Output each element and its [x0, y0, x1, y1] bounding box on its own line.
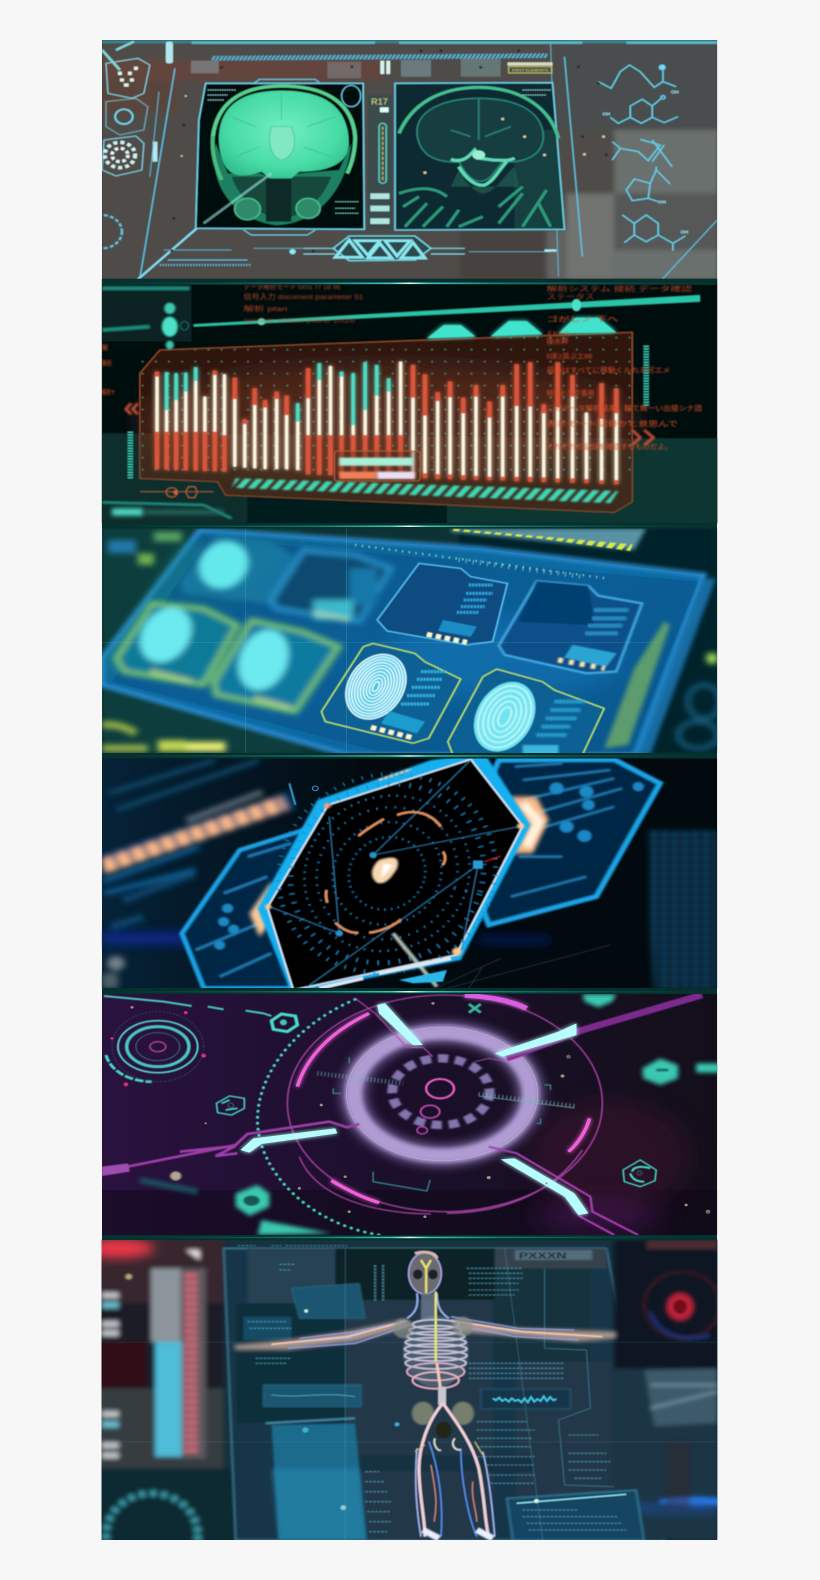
left icon column	[102, 40, 152, 250]
outer thin magenta rings	[287, 995, 602, 1214]
pink center circles	[417, 1079, 454, 1134]
red Japanese data text: ゴがしノ 下へ	[547, 315, 618, 323]
red Japanese data text: 解析ヤ	[102, 388, 115, 396]
teal trapezoids	[427, 318, 616, 338]
image backing	[102, 40, 717, 1540]
red Japanese data text: ステータス	[547, 293, 594, 301]
status bars left	[102, 1292, 119, 1458]
teal bar caps	[167, 362, 389, 425]
sharp fingerprint card	[321, 643, 461, 743]
red Japanese data text: 特マヒラク事用	[547, 389, 594, 397]
right background hexagon	[459, 759, 660, 925]
red Japanese data text: 解析 plan	[244, 305, 287, 313]
blurred top-left cards	[116, 535, 391, 712]
red Japanese data text: 5床2具ぶエ96	[547, 352, 592, 360]
spine and pelvis	[437, 1363, 443, 1403]
HUD frame lines	[138, 43, 717, 279]
left dim column	[82, 1235, 238, 1577]
dotted ruler	[355, 545, 606, 578]
red Japanese data text: このデータ解析結果、観て無一い出接シナ語	[547, 404, 703, 412]
teal dotted arc	[257, 999, 379, 1235]
left brain scan	[196, 79, 364, 235]
left background hexagon	[182, 830, 303, 988]
blue tile bottom-left	[271, 1423, 366, 1540]
dotted arc bottom-left	[106, 1493, 198, 1577]
red Japanese data text: 解析システム 接続 データ確認	[547, 285, 693, 293]
cyan bright blades	[240, 1003, 588, 1215]
labels: OH groups: OH	[681, 230, 689, 235]
chart background panel	[140, 332, 632, 512]
data blocks	[244, 1283, 644, 1540]
skeleton arms	[234, 1317, 616, 1350]
legs	[415, 1403, 495, 1538]
red Japanese data text: 解	[102, 344, 109, 352]
slanted teal stripes	[232, 478, 618, 503]
rulers	[317, 1057, 574, 1191]
center slider box	[334, 451, 420, 481]
blurred side ornaments	[102, 532, 720, 752]
red Japanese data text: それぞれの記録を確認するものだよ。	[547, 443, 672, 451]
triangle control row	[303, 236, 465, 261]
blurred background stripes	[102, 760, 551, 988]
waveform	[493, 1396, 557, 1402]
text lines blocks	[238, 1246, 626, 1532]
red Japanese data text: データ解析モード 0x51 77 1B 9E	[244, 283, 341, 291]
labels: OH groups	[602, 90, 689, 235]
panel: hexagon radar HUD	[102, 753, 717, 993]
yellow hatched strip	[451, 528, 646, 550]
dot grid	[170, 49, 608, 252]
orange arc segments	[326, 812, 445, 933]
panel: human skeleton hologram HUD	[82, 1235, 730, 1577]
chevrons	[126, 403, 653, 445]
side teal tick strips	[130, 346, 646, 479]
lower right fingerprint card	[448, 669, 604, 759]
red Japanese data text: 操水粹	[547, 337, 569, 345]
hex icons	[216, 1014, 656, 1187]
red Japanese data text: それから	[547, 330, 570, 338]
right brain scan	[395, 83, 564, 230]
red Japanese data text: 信号入力 document parameter 51	[244, 293, 363, 301]
panel: fingerprint scanner HUD	[102, 528, 720, 759]
skeleton hologram	[234, 1252, 616, 1538]
small data text top	[191, 58, 553, 78]
skull	[409, 1253, 441, 1294]
labels: OH groups: OH	[658, 200, 667, 205]
tinted tiles	[236, 1248, 632, 1540]
panel: purple radial target HUD	[102, 994, 720, 1237]
right chevron strip	[604, 622, 670, 748]
main hexagon radar	[252, 753, 610, 993]
blurred data columns right	[646, 830, 717, 988]
left teal rings gauge	[106, 1012, 204, 1082]
sparkles	[302, 1309, 399, 1510]
bar chart	[157, 362, 616, 484]
radar dotted rings	[252, 753, 522, 993]
main tilted blue board	[102, 530, 704, 755]
white bar sections	[157, 362, 616, 480]
red Japanese data text: 最後はすべてに移動くルれる可エメ	[547, 366, 670, 374]
hatched top strip	[212, 53, 547, 61]
bottom left gauge	[102, 487, 232, 518]
second card top	[499, 581, 642, 673]
ribcage	[403, 1316, 468, 1388]
center control strip	[368, 61, 393, 230]
dashed inner ring	[392, 1058, 490, 1125]
vertical data column	[151, 1268, 206, 1458]
red Japanese data text	[102, 283, 703, 451]
radar spokes	[269, 760, 519, 987]
red Japanese data text: 解析	[102, 359, 112, 367]
panel: equalizer bar chart HUD	[102, 279, 718, 523]
chemical structures	[598, 65, 685, 251]
sharp card top	[377, 563, 507, 645]
label: screen title: PXXXN	[519, 1251, 566, 1260]
label: R17: R17	[371, 97, 388, 106]
label: first elements: FIRST ELEMENTS	[512, 68, 548, 72]
HUD screen	[224, 1248, 664, 1540]
labels: OH groups: OH	[602, 112, 611, 117]
red Japanese data text: system status plane 2026	[244, 316, 355, 324]
labels: OH groups: OH	[671, 90, 679, 95]
center bright core	[372, 858, 398, 883]
glare streaks	[393, 933, 437, 987]
panel: brain scan HUD	[82, 40, 718, 280]
right outer	[602, 1240, 730, 1540]
top teal slider	[102, 288, 700, 349]
separator bands between panels	[102, 279, 717, 1240]
main lavender ring	[354, 1032, 531, 1156]
dashed teal top-left line	[104, 996, 271, 1016]
orange bar sections	[157, 362, 616, 484]
magenta connector lines	[102, 995, 702, 1235]
faint grid	[102, 528, 658, 753]
red Japanese data text: 表示モード切替かと意思んで	[547, 420, 678, 428]
orange LED strip	[102, 792, 295, 875]
star specks	[130, 1002, 710, 1218]
